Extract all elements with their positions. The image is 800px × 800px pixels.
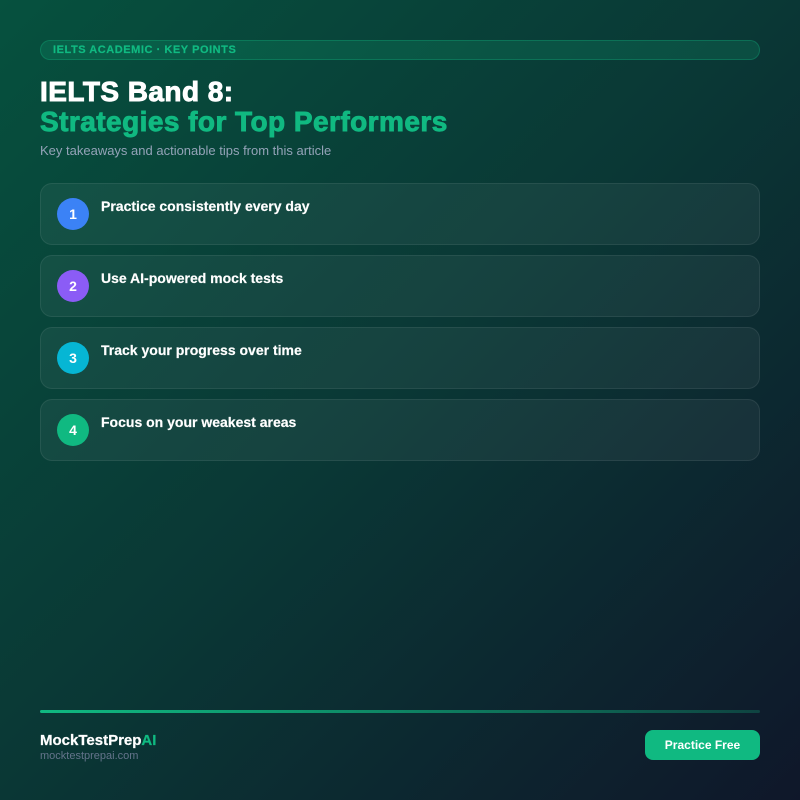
text: point 3: Track your progress over time [101, 342, 302, 358]
icon: number 2 [57, 270, 89, 302]
icon: number 1: 1 [69, 206, 77, 222]
title: Strategies for Top Performers [40, 106, 448, 137]
button: call to action [645, 730, 760, 760]
icon: number 1 [57, 198, 89, 230]
text: point 2: Use AI-powered mock tests [101, 270, 283, 286]
panel: key point 3 [40, 327, 760, 389]
panel: key point 1 [40, 183, 760, 245]
icon: number 3 [57, 342, 89, 374]
icon: number 4: 4 [69, 422, 77, 438]
text: point 1: Practice consistently every day [101, 198, 310, 214]
badge: category label: IELTS ACADEMIC · KEY POINTS [53, 44, 236, 56]
icon: number 2: 2 [69, 278, 77, 294]
icon: number 3: 3 [69, 350, 77, 366]
icon: number 4 [57, 414, 89, 446]
text: point 4: Focus on your weakest areas [101, 414, 296, 430]
subtitle: Key takeaways and actionable tips from this article [40, 143, 331, 158]
button: call to action: Practice Free [665, 738, 740, 752]
panel: key point 2 [40, 255, 760, 317]
panel: key point 4 [40, 399, 760, 461]
title: IELTS Band 8: [40, 76, 234, 107]
badge: category label [40, 40, 760, 60]
brand name: MockTestPrepAI [40, 732, 156, 749]
brand url: mocktestprepai.com [40, 750, 138, 762]
title [40, 76, 448, 138]
